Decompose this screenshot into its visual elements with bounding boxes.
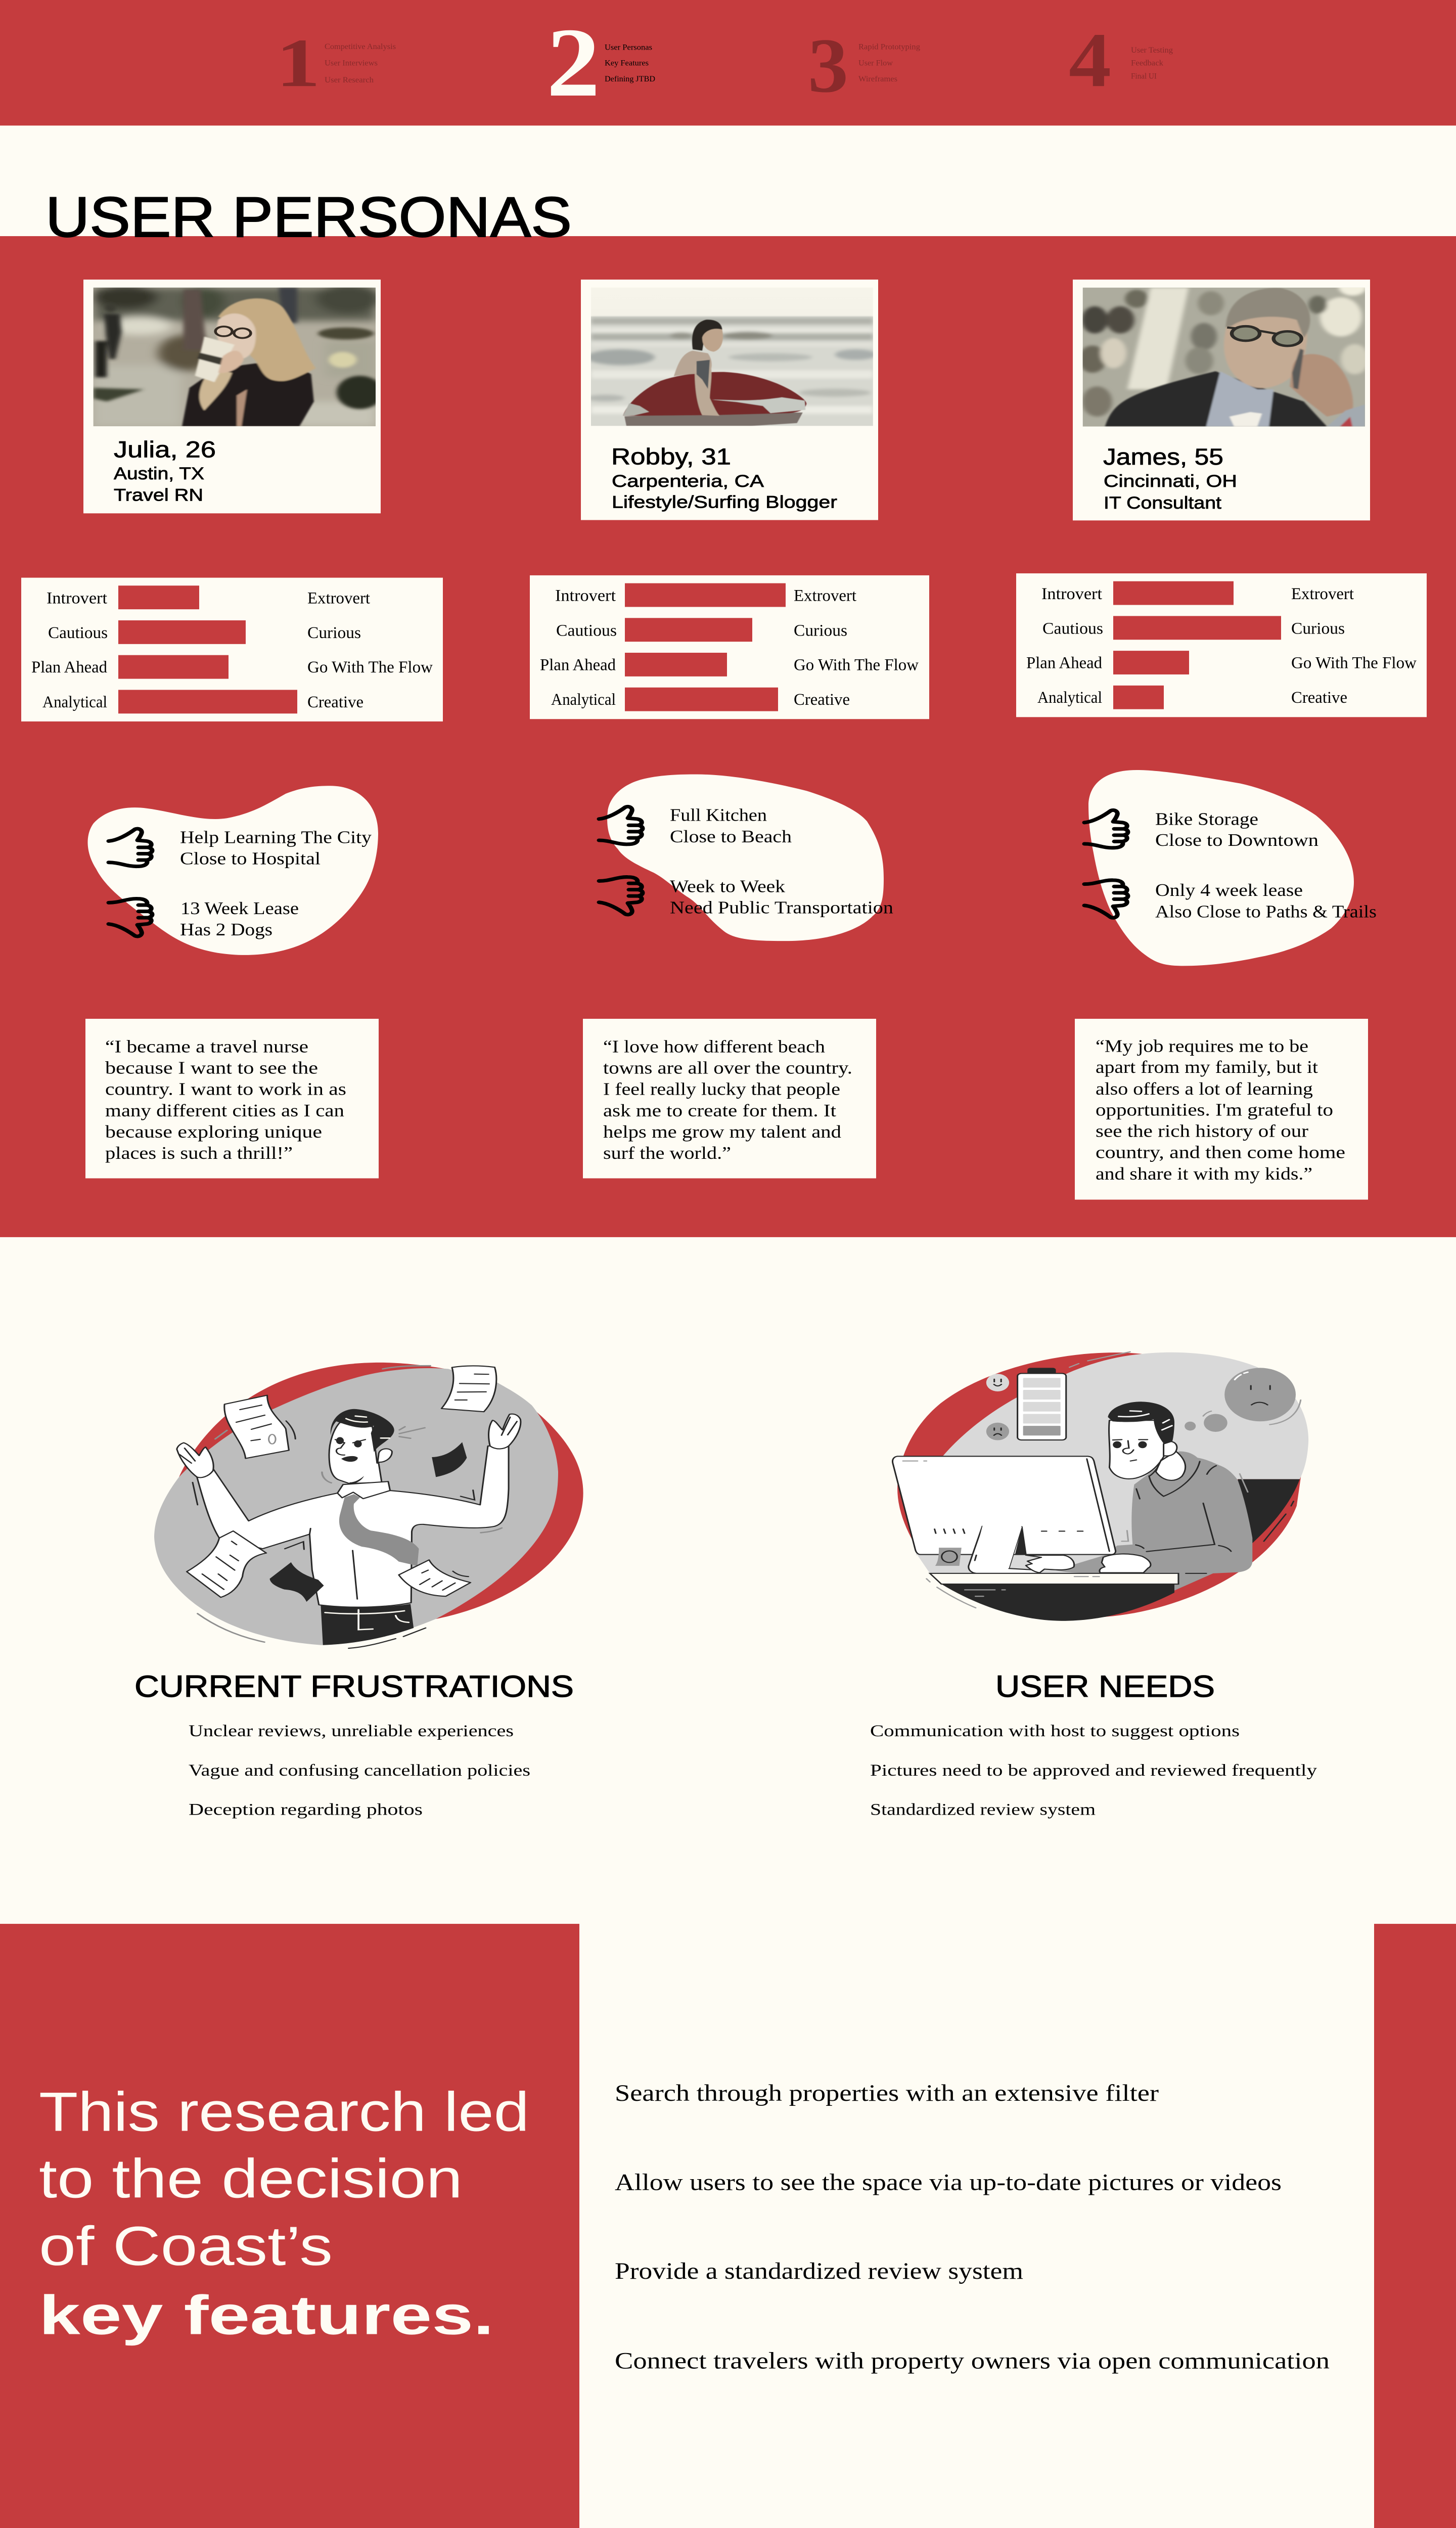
step 2 (active): User Personas	[605, 42, 652, 52]
pros and cons text: Full Kitchen	[670, 805, 767, 825]
step 1: User Interviews	[325, 59, 378, 67]
trait chart: Julia: Analytical	[42, 693, 107, 711]
step 2 (active): 2	[547, 8, 600, 117]
photo: Robby	[586, 288, 877, 426]
persona details: Travel RN	[114, 485, 203, 505]
persona details	[1103, 444, 1237, 513]
step 4: User Testing	[1131, 46, 1173, 54]
list: user needs: Pictures need to be approved and reviewed frequently	[870, 1761, 1317, 1780]
icon: thumbs down	[599, 877, 643, 915]
headline: key features.	[39, 2284, 494, 2346]
persona details: Julia, 26	[114, 437, 216, 463]
trait chart: James: Plan Ahead	[1026, 654, 1102, 672]
persona details: Cincinnati, OH	[1104, 472, 1237, 491]
pros and cons text: Has 2 Dogs	[180, 920, 272, 939]
trait chart: James: Introvert	[1041, 584, 1102, 603]
list: current frustrations: Unclear reviews, unreliable experiences	[189, 1722, 514, 1740]
list: key features: Search through properties with an extensive filter	[615, 2080, 1159, 2106]
papers	[187, 1366, 496, 1597]
panel: key features left	[0, 1924, 579, 2528]
trait chart: Julia: Curious	[307, 623, 361, 642]
pros and cons text	[670, 805, 893, 917]
list: user needs	[870, 1722, 1317, 1819]
step 1: Competitive Analysis	[325, 42, 396, 51]
trait chart: Robby: Introvert	[555, 586, 616, 605]
step 1: 1	[276, 24, 320, 101]
desk and hands	[930, 1573, 1178, 1584]
quote: James: see the rich history of our	[1096, 1121, 1308, 1141]
step 1	[276, 24, 396, 101]
trait chart: Robby: Creative	[794, 690, 850, 709]
step 4	[1069, 17, 1173, 103]
step 3: Wireframes	[858, 74, 897, 83]
trait chart: James: Creative	[1291, 688, 1347, 707]
trait chart: Robby: Plan Ahead	[540, 656, 616, 674]
list: user needs: Communication with host to suggest options	[870, 1722, 1240, 1740]
persona details: IT Consultant	[1104, 493, 1221, 513]
list: current frustrations	[189, 1722, 530, 1819]
persona details: James, 55	[1103, 444, 1223, 470]
quote: Julia: “I became a travel nurse	[105, 1037, 308, 1056]
trait chart: James	[1016, 573, 1427, 717]
trait chart: Julia: Cautious	[48, 623, 108, 642]
trait chart: James: Analytical	[1037, 688, 1102, 707]
trait chart: James: Cautious	[1042, 619, 1103, 638]
man body	[177, 1414, 521, 1607]
pros and cons text	[180, 828, 372, 939]
quote: James: opportunities. I'm grateful to	[1096, 1100, 1333, 1119]
pros and cons text: Help Learning The City	[180, 828, 372, 847]
trait chart: James: Go With The Flow	[1291, 654, 1417, 672]
persona details: Lifestyle/Surfing Blogger	[612, 492, 837, 512]
illustration: tired man at computer	[893, 1352, 1308, 1621]
trait chart: Julia	[21, 578, 443, 721]
quote: Julia: many different cities as I can	[105, 1101, 344, 1120]
man sweater	[1055, 1452, 1252, 1591]
panel: personas background	[0, 236, 1456, 1237]
pros and cons text: Also Close to Paths & Trails	[1155, 902, 1377, 921]
trait chart: Robby: Go With The Flow	[794, 656, 919, 674]
list: key features: Allow users to see the space via up-to-date pictures or videos	[615, 2169, 1282, 2195]
quote: James: and share it with my kids.”	[1096, 1164, 1312, 1184]
icon: thumbs down	[1084, 880, 1128, 918]
quote: James: country, and then come home	[1096, 1143, 1345, 1162]
icon: thumbs up	[109, 829, 152, 867]
persona card: Robby	[581, 280, 878, 520]
icon: thumbs down	[109, 899, 152, 936]
monitor	[893, 1456, 1116, 1573]
quote: Julia: because I want to see the	[105, 1058, 318, 1077]
persona card: Julia	[83, 280, 383, 513]
step 2 (active): Key Features	[605, 59, 649, 67]
quote: James: “My job requires me to be	[1096, 1036, 1308, 1056]
battery	[1018, 1368, 1066, 1440]
pros and cons text: Bike Storage	[1155, 809, 1258, 829]
trait chart: Julia: Creative	[307, 693, 363, 711]
header band: process steps	[0, 0, 1456, 125]
step 3	[808, 23, 920, 109]
icon: thumbs up	[1084, 810, 1128, 848]
trait chart: Julia: Plan Ahead	[31, 658, 107, 676]
quote: Robby: I feel really lucky that people	[603, 1079, 840, 1099]
illustration: frustrated man with flying papers	[154, 1363, 583, 1648]
persona details	[611, 444, 837, 512]
trait chart: James: Curious	[1291, 619, 1345, 638]
persona details: Robby, 31	[611, 444, 731, 470]
heading: current frustrations: CURRENT FRUSTRATIONS	[134, 1669, 574, 1703]
pros and cons text: Only 4 week lease	[1155, 881, 1303, 900]
step 4: Feedback	[1131, 59, 1163, 67]
trait chart: Robby: Curious	[794, 621, 847, 640]
paper lines and face details	[193, 1374, 489, 1648]
step 3: 3	[808, 23, 848, 109]
list: key features: Connect travelers with property owners via open communication	[615, 2348, 1330, 2374]
step 4: Final UI	[1131, 71, 1157, 80]
man head	[1109, 1420, 1186, 1480]
quote: Julia: because exploring unique	[105, 1122, 322, 1142]
quote: Robby: surf the world.”	[603, 1144, 731, 1163]
quote: Robby: “I love how different beach	[603, 1037, 825, 1056]
panel: right edge band	[1374, 1924, 1456, 2528]
quote: James: apart from my family, but it	[1096, 1058, 1318, 1077]
trait chart: James: Extrovert	[1291, 584, 1354, 603]
step 3: User Flow	[858, 59, 893, 67]
pros and cons text: Close to Downtown	[1155, 830, 1318, 850]
headline: This research led	[39, 2081, 529, 2143]
headline: to the decision	[39, 2147, 463, 2209]
photo: James	[1078, 278, 1369, 427]
quote: Julia	[85, 1019, 379, 1179]
quote: James: also offers a lot of learning	[1096, 1079, 1313, 1099]
quote: Robby: ask me to create for them. It	[603, 1101, 836, 1120]
step 4: 4	[1069, 17, 1111, 103]
list: user needs: Standardized review system	[870, 1800, 1096, 1819]
trait chart: Julia: Extrovert	[307, 589, 370, 607]
list: current frustrations: Deception regarding photos	[189, 1800, 423, 1819]
quote: Robby: towns are all over the country.	[603, 1058, 852, 1077]
trait chart: Robby: Extrovert	[794, 586, 856, 605]
pros and cons: James	[1084, 770, 1377, 966]
step 2 (active): Defining JTBD	[605, 74, 655, 83]
photo: Julia	[93, 284, 383, 426]
pros and cons text: Close to Hospital	[180, 849, 321, 868]
pros and cons: Julia	[88, 786, 378, 955]
pros and cons text: Close to Beach	[670, 827, 792, 846]
step 3: Rapid Prototyping	[858, 42, 920, 51]
quote: Julia: places is such a thrill!”	[105, 1144, 293, 1163]
persona details: Austin, TX	[114, 464, 204, 483]
persona details: Carpenteria, CA	[612, 472, 764, 491]
persona details	[114, 437, 216, 505]
title: USER PERSONAS	[46, 186, 572, 249]
icon: thumbs up	[599, 806, 643, 844]
step 1: User Research	[325, 75, 374, 84]
trait chart: Robby: Analytical	[551, 690, 616, 709]
list: current frustrations: Vague and confusing cancellation policies	[189, 1761, 530, 1780]
faces	[927, 1352, 1301, 1608]
list: key features: Provide a standardized review system	[615, 2258, 1023, 2284]
quote: Robby	[583, 1019, 876, 1179]
trait chart: Julia: Go With The Flow	[307, 658, 433, 676]
pros and cons text: Week to Week	[670, 877, 785, 896]
trait chart: Robby	[530, 575, 929, 719]
pros and cons: Robby	[599, 775, 893, 941]
trait chart: Robby: Cautious	[556, 621, 617, 640]
persona card: James	[1073, 278, 1370, 520]
pros and cons text: Need Public Transportation	[670, 898, 893, 917]
trait chart: Julia: Introvert	[47, 589, 107, 607]
list: key features	[615, 2080, 1330, 2374]
headline: of Coast’s	[39, 2215, 333, 2277]
sticky note	[935, 1548, 962, 1566]
pros and cons text: 13 Week Lease	[180, 899, 299, 918]
pros and cons text	[1155, 809, 1377, 921]
heading: user needs: USER NEEDS	[995, 1669, 1215, 1703]
headline	[39, 2081, 529, 2346]
quote: Julia: country. I want to work in as	[105, 1079, 346, 1099]
step 2 (active)	[547, 8, 655, 117]
quote: Robby: helps me grow my talent and	[603, 1122, 841, 1142]
quote: James	[1075, 1019, 1368, 1200]
